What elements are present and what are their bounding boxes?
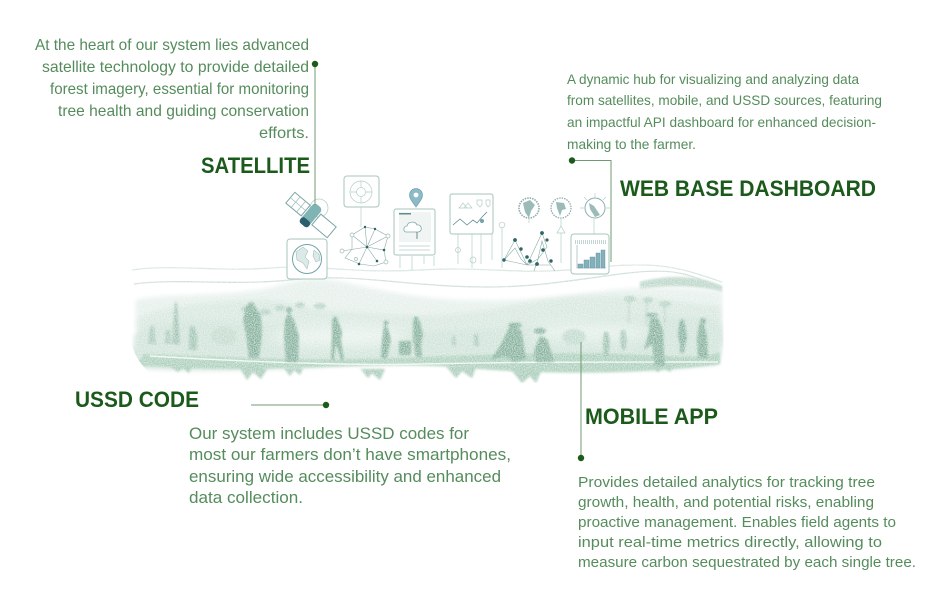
heading: mobile app: MOBILE APP	[585, 404, 718, 429]
leader: ussd code	[251, 402, 329, 408]
text block: satellite description: tree health and guiding conservation	[58, 103, 309, 120]
small node	[499, 222, 505, 268]
text block: ussd description	[189, 424, 511, 507]
text block: ussd description: data collection.	[189, 488, 303, 507]
text block: mobile app description: input real-time metrics directly, allowing to	[578, 534, 882, 551]
middle hills	[137, 296, 722, 333]
icon: trend chart card	[450, 194, 493, 268]
leader: mobile app	[578, 342, 584, 461]
ground band	[131, 352, 720, 372]
text block: mobile app description: proactive management. Enables field agents to	[578, 514, 896, 531]
light fog	[270, 326, 410, 346]
farmers	[148, 302, 708, 366]
text block: dashboard description: from satellites, mobile, and USSD sources, featuring	[567, 92, 882, 108]
leader: satellite	[312, 61, 318, 205]
text block: mobile app description: growth, health, and potential risks, enabling	[578, 494, 874, 511]
icon: location pin	[410, 189, 422, 207]
heading: ussd code: USSD CODE	[75, 387, 199, 412]
network: dark mesh	[502, 231, 555, 271]
farmer figures, left group	[148, 302, 423, 362]
text block: dashboard description	[567, 71, 882, 152]
text block: mobile app description	[578, 474, 916, 571]
illustration: forest landscape with farmers	[123, 265, 723, 383]
distant ridge lines	[132, 265, 722, 330]
text block: satellite description	[35, 37, 309, 142]
text block: satellite description: At the heart of our system lies advanced	[35, 37, 309, 54]
farmer figures, right group	[452, 313, 708, 366]
text block: mobile app description: Provides detailed analytics for tracking tree	[578, 474, 875, 491]
text block: satellite description: satellite technology to provide detailed	[42, 59, 309, 76]
foreground mist band	[132, 326, 724, 373]
tree clusters	[172, 296, 671, 345]
text block: mobile app description: measure carbon sequestrated by each single tree.	[578, 554, 916, 571]
text block: dashboard description: an impactful API dashboard for enhanced decision-	[567, 114, 876, 130]
network: left mesh	[340, 226, 390, 266]
icons: three globes	[519, 193, 610, 263]
foliage	[170, 366, 673, 383]
icon: satellite	[282, 188, 339, 242]
leader: web base dashboard	[569, 157, 611, 262]
heading: web base dashboard: WEB BASE DASHBOARD	[620, 176, 876, 201]
text block: ussd description: Our system includes USSD codes for	[189, 424, 469, 443]
text block: ussd description: most our farmers don’t have smartphones,	[189, 445, 511, 464]
icon: bar chart card	[571, 234, 609, 274]
text block: dashboard description: A dynamic hub for visualizing and analyzing data	[567, 71, 859, 87]
icon: cloud data board	[394, 209, 435, 270]
heading: satellite: SATELLITE	[201, 153, 310, 178]
icon: earth card	[287, 239, 327, 279]
text block: satellite description: forest imagery, essential for monitoring	[50, 81, 309, 98]
text block: ussd description: ensuring wide accessibility and enhanced	[189, 467, 501, 486]
icon: radar card	[344, 176, 379, 227]
text block: satellite description: efforts.	[259, 125, 309, 142]
text block: dashboard description: making to the farmer.	[567, 136, 696, 152]
